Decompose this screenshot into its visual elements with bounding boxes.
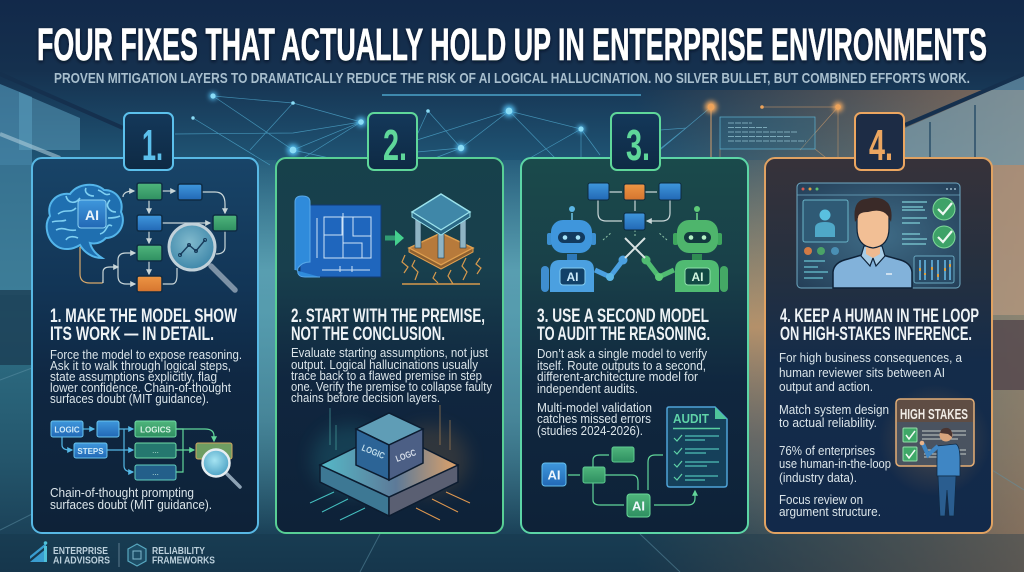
body text 1: state assumptions explicitly, flag <box>50 370 217 384</box>
heading 1: 1. MAKE THE MODEL SHOW <box>50 306 237 327</box>
panel: fix 3 <box>521 113 748 533</box>
icon: two AI robots auditing a flow <box>541 183 728 292</box>
body text 1b <box>50 486 212 512</box>
body text 4 <box>779 351 962 519</box>
body text 4: (industry data). <box>779 471 857 485</box>
body text 1b: surfaces doubt (MIT guidance). <box>50 498 212 512</box>
icon: human reviewer at dashboard <box>797 183 960 288</box>
heading 4 <box>780 306 979 345</box>
audit document <box>667 407 727 487</box>
icon: logic block on platform: LOGC <box>394 447 418 464</box>
icon: reviewer at high stakes board <box>879 384 991 516</box>
audit flow diagram: AI <box>548 468 560 482</box>
number badge 3: 3. <box>626 121 650 170</box>
body text 3: independent audits. <box>537 382 638 396</box>
panel: fix 4 <box>765 113 992 533</box>
robot left <box>541 206 628 292</box>
body text 4: Focus review on <box>779 493 863 507</box>
body text 4: argument structure. <box>779 505 881 519</box>
number badge 4 <box>855 113 904 170</box>
number badge 3 <box>611 113 660 170</box>
body text 3: (studies 2024-2026). <box>537 424 643 438</box>
body text 1: Force the model to expose reasoning. <box>50 348 242 362</box>
audit document: AUDIT <box>673 412 709 426</box>
body text 2 <box>291 346 493 405</box>
panel: fix 1 <box>32 113 258 533</box>
logic chain diagram: LOGIC <box>54 426 80 434</box>
icon: logic block on platform: LOGIC <box>360 443 387 461</box>
number badge 2 <box>368 113 417 170</box>
robot left: AI <box>566 270 578 284</box>
robot right <box>642 206 728 292</box>
logic chain diagram <box>51 421 240 487</box>
icon: logic block on platform <box>310 405 470 520</box>
footer logo: Enterprise AI Advisors: AI ADVISORS <box>53 556 110 566</box>
heading 1 <box>50 306 237 345</box>
body text 2: chains before decision layers. <box>291 391 440 405</box>
body text 2: Evaluate starting assumptions, not just <box>291 346 488 360</box>
body text 2: output. Logical hallucinations usually <box>291 358 479 372</box>
body text 3 <box>537 347 708 438</box>
body text 4: use human-in-the-loop <box>779 457 891 471</box>
icon: AI brain with flowchart and magnifier <box>47 183 237 292</box>
heading 3: TO AUDIT THE REASONING. <box>537 324 710 345</box>
footer logo: Reliability Frameworks: FRAMEWORKS <box>152 556 215 566</box>
icon: reviewer at high stakes board: HIGH STAKES <box>900 406 968 423</box>
body text 2: trace back to a flawed premise in step <box>291 369 482 383</box>
body text 1 <box>50 348 242 406</box>
body text 1: lower confidence. Chain-of-thought <box>50 381 231 395</box>
icon: blueprint to shaky foundation <box>295 194 481 284</box>
body text 4: For high business consequences, a <box>779 351 962 365</box>
panel: fix 2 <box>276 113 503 533</box>
footer logo: Reliability Frameworks: RELIABILITY <box>152 546 205 557</box>
body text 3: Multi-model validation <box>537 401 652 415</box>
number badge 2: 2. <box>383 121 407 170</box>
heading 2: 2. START WITH THE PREMISE, <box>291 306 485 327</box>
audit flow diagram <box>542 407 727 517</box>
number badge 1: 1. <box>142 121 163 170</box>
audit flow diagram: AI <box>632 498 645 514</box>
number badge 4: 4. <box>869 121 893 170</box>
footer logo: Enterprise AI Advisors: ENTERPRISE <box>53 546 108 557</box>
footer logo: Reliability Frameworks <box>119 543 215 567</box>
body text 3: Don’t ask a single model to verify <box>537 347 708 361</box>
heading 2: NOT THE CONCLUSION. <box>291 324 445 345</box>
heading 3 <box>537 306 710 345</box>
body text 4: to actual reliability. <box>779 416 877 430</box>
body text 4: output and action. <box>779 380 873 394</box>
robot right: AI <box>692 270 704 284</box>
heading 3: 3. USE A SECOND MODEL <box>537 306 709 327</box>
footer logo: Enterprise AI Advisors <box>30 541 110 566</box>
body text 3: catches missed errors <box>537 412 651 426</box>
number badge 1 <box>124 113 173 170</box>
body text 4: human reviewer sits between AI <box>779 366 945 380</box>
heading 2 <box>291 306 485 345</box>
body text 1b: Chain-of-thought prompting <box>50 486 194 500</box>
body text 4: Match system design <box>779 403 889 417</box>
body text 3: itself. Route outputs to a second, <box>537 359 706 373</box>
body text 1: Ask it to walk through logical steps, <box>50 359 231 373</box>
body text 1: surfaces doubt (MIT guidance). <box>50 392 209 406</box>
body text 4: 76% of enterprises <box>779 444 875 458</box>
body text 2: one. Verify the premise to collapse faulty <box>291 380 493 394</box>
logic chain diagram: ... <box>152 446 159 455</box>
logic chain diagram: STEPS <box>77 447 104 456</box>
logic chain diagram: ... <box>152 468 159 477</box>
body text 3: different-architecture model for <box>537 370 698 384</box>
icon: AI brain with flowchart and magnifier: AI <box>85 207 99 223</box>
heading 1: ITS WORK — IN DETAIL. <box>50 324 214 345</box>
logic chain diagram: LOGICS <box>140 426 171 434</box>
